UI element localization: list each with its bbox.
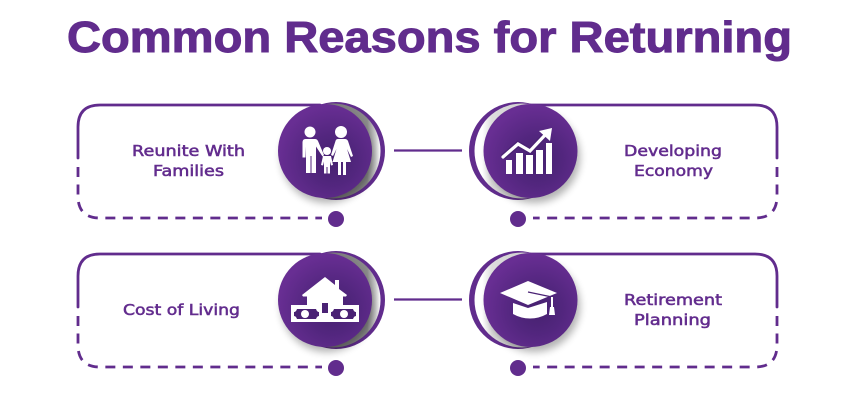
label [624,291,722,329]
end dot [510,360,526,376]
icon: house and money [291,277,359,322]
label [132,142,245,180]
badge [278,251,385,352]
icon: family [302,126,353,175]
panel: developing economy [469,102,777,227]
label: Developing [624,142,722,160]
title: Common Reasons for Returning [67,13,792,62]
panel outline [78,254,322,367]
label: Retirement [624,291,722,309]
connector top [394,149,462,152]
panel outline [530,254,777,367]
panel: reunite with families [78,102,385,227]
panel: cost of living [78,251,385,376]
label [624,142,722,180]
panel outline [78,105,322,218]
panel: retirement planning [469,251,777,376]
icon: growth chart [503,128,552,174]
end dot [328,211,344,227]
badge [469,102,580,203]
panel outline [530,105,777,218]
label: Planning [634,311,711,329]
connector bottom [394,298,462,301]
label: Families [153,162,224,180]
badge [278,102,385,203]
end dot [328,360,344,376]
badge [469,251,580,352]
label: Cost of Living [123,301,240,319]
end dot [510,211,526,227]
label: Economy [634,162,713,180]
icon: graduation cap [500,281,557,318]
label: Reunite With [132,142,245,160]
